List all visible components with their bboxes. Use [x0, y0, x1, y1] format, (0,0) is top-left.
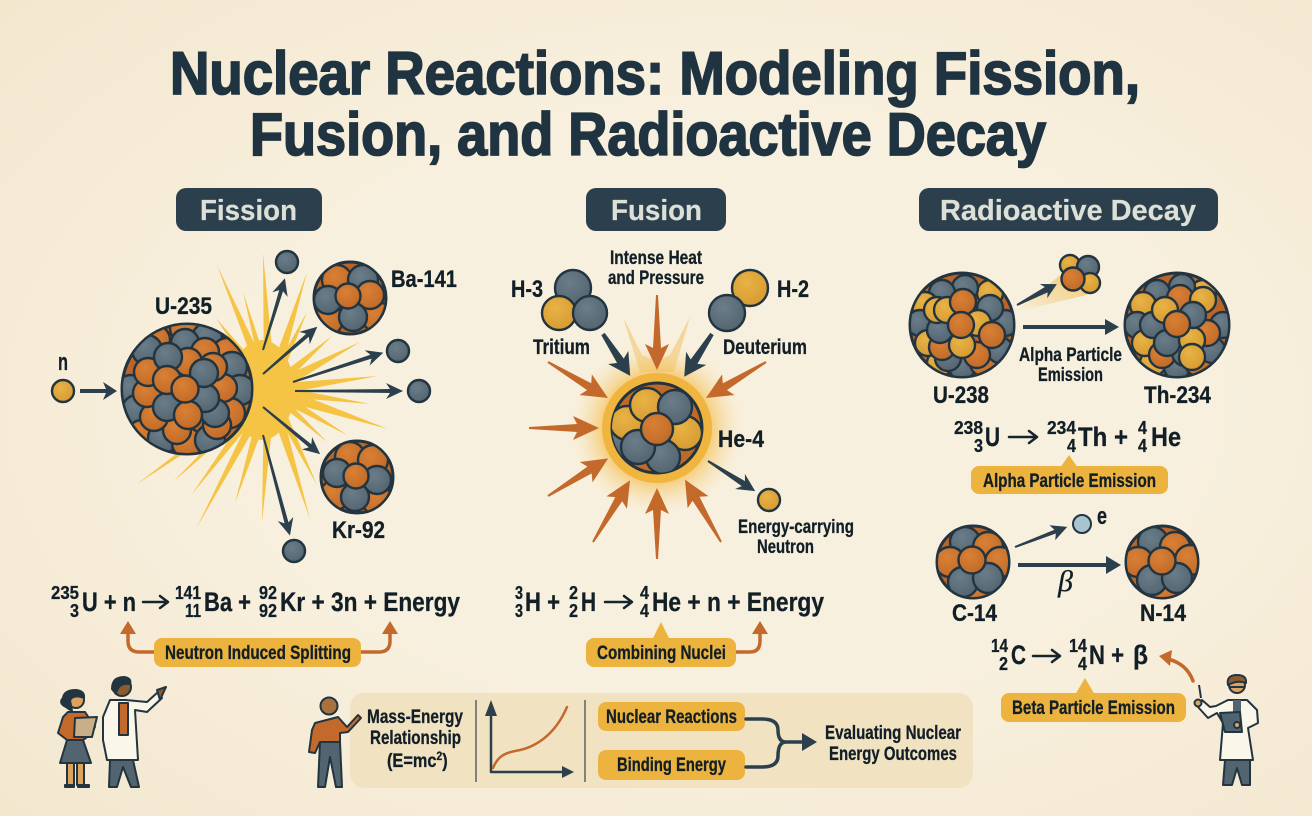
label: Intense Heat and Pressure: and Pressure [608, 268, 704, 289]
equation: fission: Ba + [204, 587, 251, 617]
equation: beta decay: 4 [1078, 654, 1087, 674]
equation: alpha decay: He [1151, 422, 1181, 452]
label: Energy-carrying Neutron: Neutron [757, 537, 814, 558]
label: Ba-141: Ba-141 [391, 266, 457, 293]
equation: fission [51, 583, 460, 621]
equation: fusion: 2 [569, 601, 578, 621]
callout: Combining Nuclei [586, 621, 768, 667]
explosion burst [137, 253, 388, 527]
molecule: tritium [542, 270, 607, 330]
equation: fusion: 3 [515, 583, 523, 603]
box: Binding Energy [598, 750, 745, 780]
heading: Fusion [586, 188, 726, 231]
text: Mass-Energy Relationship: Mass-Energy [367, 707, 463, 728]
equation: fission: 92 [259, 583, 277, 603]
figures: two scientists at left [58, 677, 166, 787]
arrow: electron emission [1012, 519, 1070, 554]
equation: beta decay [991, 636, 1148, 674]
panel: fusion diagram [511, 248, 854, 559]
text: Mass-Energy Relationship: (E=mc [387, 750, 436, 771]
heading: Radioactive Decay: Radioactive Decay [940, 195, 1196, 227]
arrows: fission products [255, 276, 403, 538]
glow and flames [565, 317, 749, 520]
equation: fusion: H [581, 587, 596, 617]
neutron: energy-carrying [758, 489, 780, 511]
label: U-238: U-238 [933, 382, 989, 409]
box: Nuclear Reactions: Nuclear Reactions [606, 707, 737, 728]
callout: Combining Nuclei: Combining Nuclei [597, 643, 726, 664]
heading: Fission: Fission [200, 195, 297, 227]
label: beta: β [1057, 565, 1073, 598]
equation: alpha decay: 4 [1138, 418, 1147, 438]
text: Evaluating Nuclear Energy Outcomes: Energy Outcomes [829, 744, 957, 765]
label: Th-234: Th-234 [1144, 382, 1212, 409]
equation: beta decay: β [1133, 640, 1148, 670]
arrows: reactants and neutron [593, 327, 760, 499]
neutron: incoming [52, 380, 74, 402]
callout: Beta Particle Emission [1001, 678, 1186, 722]
equation: alpha decay: 3 [974, 436, 983, 456]
equation: alpha decay: 4 [1067, 436, 1076, 456]
label: Intense Heat and Pressure: Intense Heat [610, 248, 703, 269]
label: He-4: He-4 [718, 426, 765, 453]
nucleus: Ba-141 [313, 262, 392, 335]
label: e: e [1097, 503, 1107, 530]
equation: fission: 141 [175, 583, 201, 603]
alpha particle [1060, 255, 1100, 293]
title: Nuclear Reactions: Modeling Fission, [170, 40, 1140, 107]
electron [1073, 515, 1091, 533]
equation: alpha decay: Th + [1078, 422, 1128, 452]
label: H-3: H-3 [511, 276, 543, 303]
label: U-235: U-235 [155, 293, 212, 320]
equation: fusion: 2 [569, 583, 578, 603]
equation: fission: 11 [185, 601, 201, 621]
nucleus: U-238 [907, 273, 1018, 380]
equation: beta decay: 14 [991, 636, 1008, 656]
text: Mass-Energy Relationship [367, 707, 463, 771]
equation: fusion: 3 [515, 601, 523, 621]
title [170, 40, 1140, 168]
equation: fusion: He + n + Energy [652, 587, 824, 617]
equation: beta decay: 2 [999, 654, 1008, 674]
equation: fusion [515, 583, 824, 621]
label: N-14: N-14 [1140, 600, 1187, 627]
equation: alpha decay: 238 [954, 418, 983, 438]
text: Mass-Energy Relationship: Relationship [370, 728, 461, 749]
equation: alpha decay: U [985, 422, 1000, 452]
label: H-2: H-2 [777, 276, 809, 303]
box: Nuclear Reactions [598, 702, 745, 731]
title: Fusion, and Radioactive Decay [250, 101, 1047, 168]
callout: Alpha Particle Emission: Alpha Particle Emission [983, 471, 1156, 492]
label: C-14: C-14 [952, 600, 998, 627]
text: Mass-Energy Relationship: 2 [436, 750, 442, 763]
label: Alpha Particle Emission: Emission [1038, 365, 1103, 386]
nucleus: N-14 [1124, 524, 1200, 600]
heading: Fission [176, 188, 322, 231]
text: Evaluating Nuclear Energy Outcomes: Evaluating Nuclear [825, 723, 961, 744]
callout: Beta Particle Emission: Beta Particle Emission [1012, 698, 1175, 719]
heading: Radioactive Decay [919, 188, 1218, 231]
nucleus: Kr-92 [320, 441, 393, 515]
equation: beta decay: N + [1089, 640, 1124, 670]
callout: Neutron Induced Splitting [120, 621, 398, 667]
equation: fusion: 4 [640, 601, 649, 621]
equation: fusion: 4 [640, 583, 649, 603]
nucleus: Th-234 [1124, 273, 1236, 380]
text: Mass-Energy Relationship: ) [442, 750, 448, 771]
label: Energy-carrying Neutron: Energy-carrying [738, 517, 854, 538]
equation: alpha decay: 4 [1138, 436, 1147, 456]
label: Alpha Particle Emission [1019, 345, 1122, 386]
heading: Fusion: Fusion [611, 195, 702, 227]
molecule: deuterium [709, 270, 768, 331]
equation: fusion: H + [525, 587, 560, 617]
arrows: heat and pressure [529, 295, 772, 559]
equation: alpha decay: 234 [1047, 418, 1076, 438]
box: Binding Energy: Binding Energy [617, 755, 726, 776]
arrow: U-238 to Th-234 [1023, 319, 1119, 335]
equation: fission: 235 [51, 583, 79, 603]
panel: beta decay diagram [936, 510, 1200, 622]
panel: summary [350, 693, 973, 788]
label: Energy-carrying Neutron [738, 517, 854, 558]
equation: fission: 3 [70, 601, 79, 621]
equation: alpha decay [954, 418, 1181, 456]
callout: Alpha Particle Emission [971, 455, 1168, 494]
man in lab coat [103, 677, 166, 787]
nucleus: He-4 [603, 383, 702, 474]
panel: fission diagram [52, 251, 457, 562]
label: Deuterium: Deuterium [723, 336, 807, 359]
equation: beta decay: 14 [1069, 636, 1087, 656]
arrow: neutron to U-235 [80, 382, 117, 400]
panel: alpha decay diagram [907, 255, 1236, 409]
equation: fission: Kr + 3n + Energy [280, 587, 460, 617]
figure: scientist at right [1194, 675, 1258, 785]
label: Alpha Particle Emission: Alpha Particle [1019, 345, 1122, 366]
equation: fission: 92 [259, 601, 277, 621]
arrow: scientist pointing to equation [1159, 650, 1193, 681]
label: Kr-92: Kr-92 [332, 517, 385, 544]
arrow: alpha emission [1013, 277, 1061, 312]
figure: presenter at summary panel [309, 698, 361, 787]
alpha particle beam [1015, 267, 1087, 312]
equation: fission: U + n [82, 587, 136, 617]
chart: energy curve [485, 700, 574, 778]
callout: Neutron Induced Splitting: Neutron Induced Splitting [165, 643, 351, 664]
equation: beta decay: C [1011, 640, 1026, 670]
label: Tritium: Tritium [533, 336, 590, 359]
nucleus: U-235 [120, 322, 254, 456]
arrow: merge to outcomes [746, 719, 817, 767]
nucleus: C-14 [936, 524, 1010, 600]
neutrons: released [276, 251, 430, 562]
woman with clipboard [58, 690, 97, 787]
label: Intense Heat and Pressure [608, 248, 704, 289]
text: Evaluating Nuclear Energy Outcomes [825, 723, 961, 765]
arrow: C-14 to N-14 [1018, 556, 1121, 574]
label: n: n [58, 349, 68, 376]
